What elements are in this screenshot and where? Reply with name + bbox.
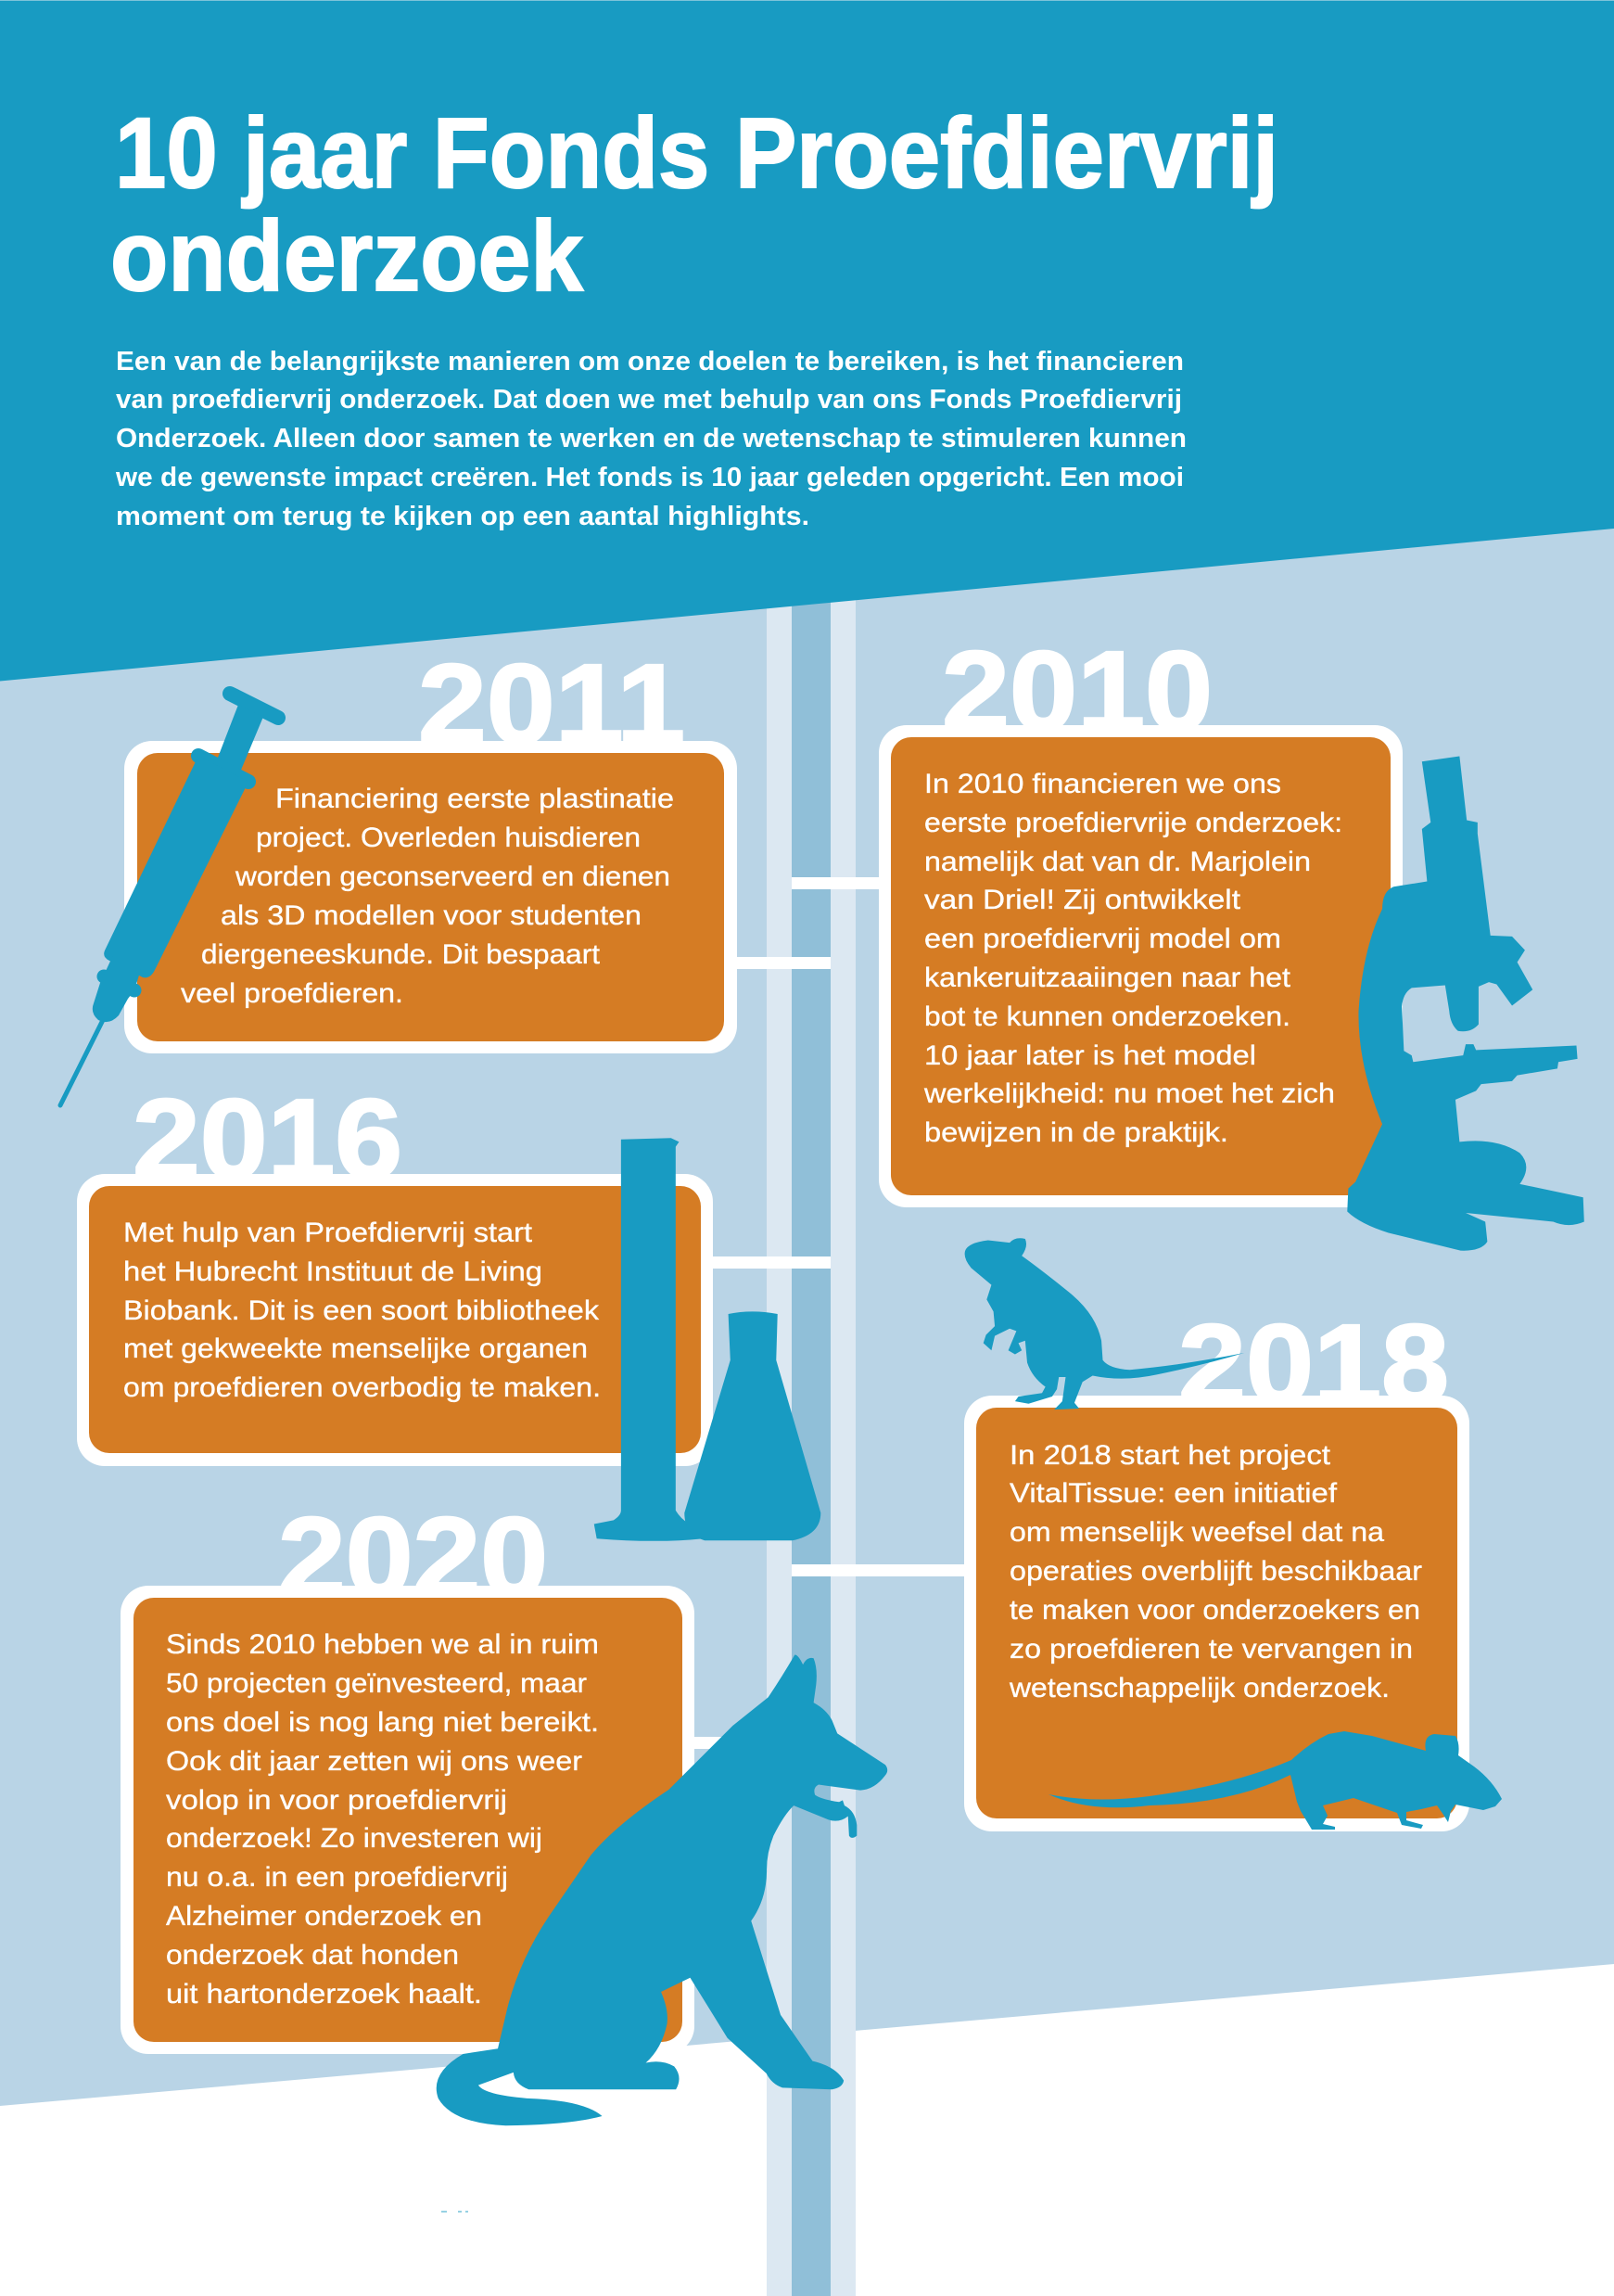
intro text: Onderzoek. Alleen door samen te werken en de wetenschap te stimuleren kunnen [116, 424, 1187, 453]
text 2020: nu o.a. in een proefdiervrij [166, 1862, 508, 1893]
intro text: moment om terug te kijken op een aantal highlights. [116, 502, 809, 531]
year 2018: 2018 [1178, 1301, 1449, 1427]
icon: measuring cylinder [594, 1138, 704, 1541]
panel: 2016 [77, 1076, 831, 1541]
text 2016: het Hubrecht Instituut de Living [123, 1256, 542, 1287]
title: onderzoek [110, 199, 584, 312]
intro text: we de gewenste impact creëren. Het fonds is 10 jaar geleden opgericht. Een mooi [115, 463, 1184, 492]
text 2018: zo proefdieren te vervangen in [1010, 1634, 1413, 1665]
icon: mouse [1048, 1731, 1502, 1830]
timeline stripes [767, 593, 856, 2296]
text 2011: als 3D modellen voor studenten [221, 900, 642, 931]
text 2020: volop in voor proefdiervrij [166, 1785, 507, 1816]
text 2020: uit hartonderzoek haalt. [166, 1979, 482, 2009]
text 2018: In 2018 start het project [1010, 1440, 1331, 1471]
text 2010: eerste proefdiervrije onderzoek: [924, 808, 1342, 838]
header band [0, 0, 1614, 681]
box 2016 [77, 1174, 713, 1466]
text 2010: bewijzen in de praktijk. [924, 1117, 1228, 1148]
box 2018 [964, 1396, 1469, 1831]
text 2018 [1009, 1440, 1422, 1703]
year 2020: 2020 [278, 1494, 548, 1620]
intro text: Een van de belangrijkste manieren om onze doelen te bereiken, is het financieren [116, 347, 1184, 376]
year 2010: 2010 [942, 628, 1213, 754]
small specks [441, 2211, 468, 2213]
text 2011: veel proefdieren. [181, 978, 403, 1009]
text 2018: operaties overblijft beschikbaar [1010, 1556, 1422, 1587]
panel: 2018 [792, 1238, 1502, 1831]
text 2010: een proefdiervrij model om [924, 924, 1281, 954]
panel: 2011 [60, 641, 831, 1105]
intro text [115, 347, 1187, 531]
text 2020: Alzheimer onderzoek en [166, 1901, 482, 1932]
text 2010: namelijk dat van dr. Marjolein [924, 847, 1311, 877]
text 2010: 10 jaar later is het model [924, 1040, 1256, 1071]
text 2010: kankeruitzaaiingen naar het [924, 963, 1291, 993]
text 2010: In 2010 financieren we ons [924, 769, 1281, 799]
box 2010 [879, 725, 1403, 1207]
year 2011: 2011 [418, 641, 685, 767]
text 2020 [166, 1629, 599, 2009]
connector 2020 [694, 1737, 831, 1749]
text 2011: Financiering eerste plastinatie [275, 784, 674, 814]
icon: microscope [1347, 757, 1584, 1251]
text 2020: Ook dit jaar zetten wij ons weer [166, 1746, 582, 1777]
year 2016: 2016 [133, 1076, 402, 1202]
text 2010: werkelijkheid: nu moet het zich [923, 1078, 1335, 1109]
text 2016 [123, 1218, 601, 1403]
text 2018: wetenschappelijk onderzoek. [1009, 1673, 1390, 1703]
connector 2016 [713, 1256, 831, 1269]
text 2010: bot te kunnen onderzoeken. [924, 1001, 1290, 1032]
text 2018: te maken voor onderzoekers en [1010, 1595, 1420, 1626]
box 2011 [124, 741, 737, 1053]
box 2020 [121, 1586, 694, 2054]
text 2011: diergeneeskunde. Dit bespaart [201, 939, 601, 970]
icon: dog [437, 1654, 887, 2125]
text 2018: om menselijk weefsel dat na [1010, 1517, 1384, 1548]
text 2016: Biobank. Dit is een soort bibliotheek [123, 1295, 600, 1326]
text 2020: Sinds 2010 hebben we al in ruim [166, 1629, 599, 1660]
text 2011: project. Overleden huisdieren [256, 823, 641, 853]
icon: syringe [60, 694, 278, 1105]
text 2016: met gekweekte menselijke organen [123, 1333, 588, 1364]
text 2016: om proefdieren overbodig te maken. [123, 1372, 601, 1403]
text 2010: van Driel! Zij ontwikkelt [924, 885, 1241, 915]
text 2018: VitalTissue: een initiatief [1010, 1478, 1338, 1509]
connector 2011 [737, 957, 831, 969]
connector 2018 [792, 1564, 964, 1576]
connector 2010 [792, 877, 879, 889]
icon: flask [684, 1311, 820, 1540]
title [110, 96, 1278, 312]
text 2011 [181, 784, 674, 1009]
text 2011: worden geconserveerd en dienen [235, 861, 670, 892]
title: 10 jaar Fonds Proefdiervrij [115, 96, 1278, 209]
panel: 2010 [792, 628, 1584, 1251]
text 2020: onderzoek dat honden [166, 1940, 459, 1971]
text 2016: Met hulp van Proefdiervrij start [123, 1218, 533, 1248]
text 2020: ons doel is nog lang niet bereikt. [166, 1707, 599, 1738]
icon: standing rat [965, 1238, 1244, 1409]
text 2010 [923, 769, 1342, 1148]
text 2020: 50 projecten geïnvesteerd, maar [166, 1668, 587, 1699]
text 2020: onderzoek! Zo investeren wij [166, 1823, 542, 1854]
panel: 2020 [121, 1494, 887, 2125]
light blue background [0, 501, 1614, 2106]
intro text: van proefdiervrij onderzoek. Dat doen we met behulp van ons Fonds Proefdiervrij [116, 385, 1182, 415]
